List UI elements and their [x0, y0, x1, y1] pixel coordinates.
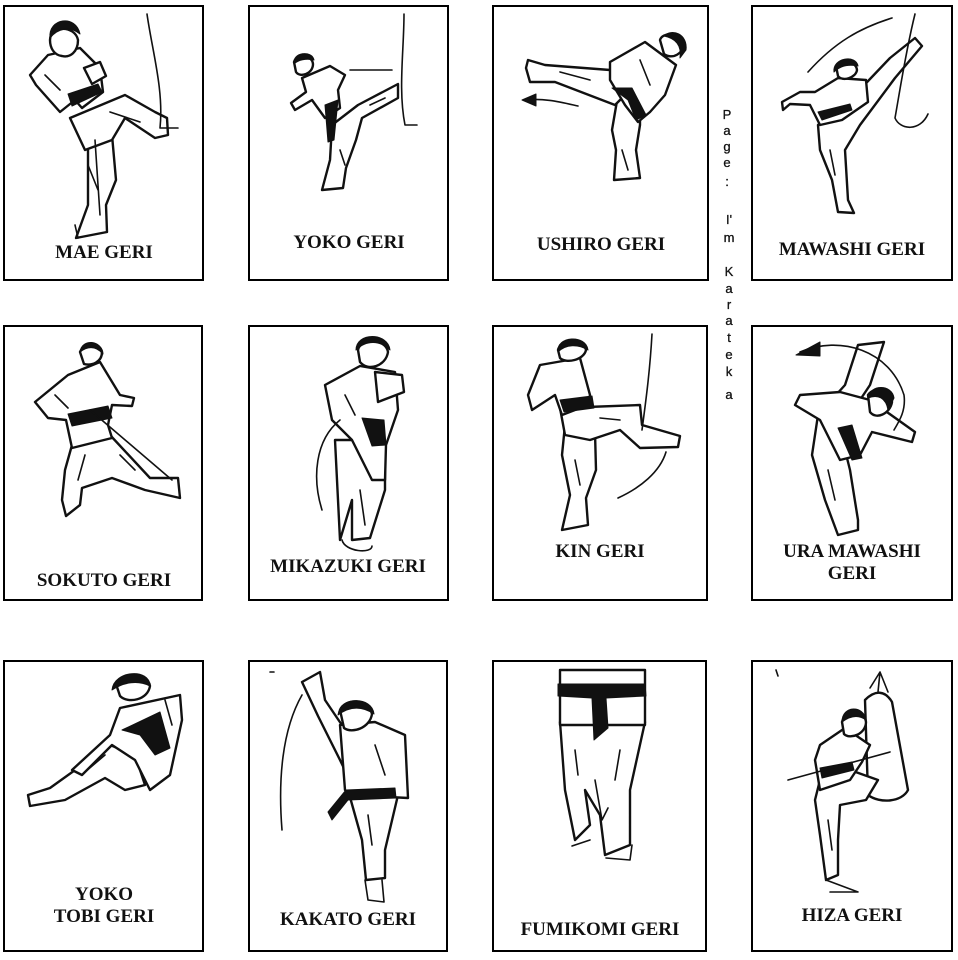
label: MAE GERI: [55, 242, 153, 263]
vertical caption: a: [725, 387, 733, 402]
vertical caption: g: [723, 139, 731, 154]
figure: Mikazuki Geri kick: [317, 336, 404, 551]
figure: Sokuto Geri kick: [35, 342, 180, 516]
label: USHIRO GERI: [537, 234, 665, 255]
label: URA MAWASHI: [783, 541, 921, 562]
panel: Mikazuki Geri: [249, 326, 448, 600]
label: FUMIKOMI GERI: [521, 919, 679, 940]
vertical caption: r: [727, 297, 732, 312]
label: GERI: [828, 563, 876, 584]
vertical caption: P: [723, 107, 731, 122]
panel: Yoko Geri: [249, 6, 448, 280]
figure: Mae Geri kick: [30, 14, 178, 238]
vertical caption: a: [725, 313, 733, 328]
vertical caption: I': [726, 212, 732, 227]
vertical caption: K: [725, 264, 734, 279]
figure: Fumikomi Geri stamp: [558, 670, 646, 860]
vertical caption: e: [723, 155, 731, 170]
figure: Kin Geri kick: [528, 334, 680, 530]
panel: Kakato Geri: [249, 661, 447, 951]
label: HIZA GERI: [802, 905, 902, 926]
label: SOKUTO GERI: [37, 570, 171, 591]
label: YOKO: [75, 884, 133, 905]
panel: Ura Mawashi Geri: [752, 326, 952, 600]
label: TOBI GERI: [54, 906, 154, 927]
label: KIN GERI: [555, 541, 645, 562]
figure: Kakato Geri kick: [270, 672, 408, 902]
figure: Mawashi Geri kick: [782, 14, 928, 213]
figure: Ura Mawashi Geri kick: [795, 342, 915, 535]
label: MIKAZUKI GERI: [270, 556, 426, 577]
vertical caption: e: [725, 347, 733, 362]
panel: Fumikomi Geri: [493, 661, 706, 951]
label: YOKO GERI: [293, 232, 405, 253]
vertical caption: t: [727, 330, 731, 345]
figure: Ushiro Geri kick: [522, 32, 686, 180]
panel: Mawashi Geri: [752, 6, 952, 280]
label: [783, 541, 921, 584]
label: KAKATO GERI: [280, 909, 416, 930]
panel: Ushiro Geri: [493, 6, 708, 280]
panel: Mae Geri: [4, 6, 203, 280]
panel: Sokuto Geri: [4, 326, 202, 600]
vertical caption: a: [723, 123, 731, 138]
vertical caption: [723, 107, 734, 402]
label: MAWASHI GERI: [779, 239, 925, 260]
figure: Hiza Geri knee strike: [776, 670, 908, 892]
vertical caption: m: [724, 230, 734, 245]
figure: Yoko Tobi Geri kick: [28, 674, 182, 806]
panel: Kin Geri: [493, 326, 707, 600]
panel: Hiza Geri: [752, 661, 952, 951]
vertical caption: :: [725, 174, 729, 189]
label: [54, 884, 154, 927]
vertical caption: a: [725, 281, 733, 296]
vertical caption: k: [726, 364, 733, 379]
figure: Yoko Geri kick: [291, 14, 417, 190]
panel: Yoko Tobi Geri: [4, 661, 203, 951]
